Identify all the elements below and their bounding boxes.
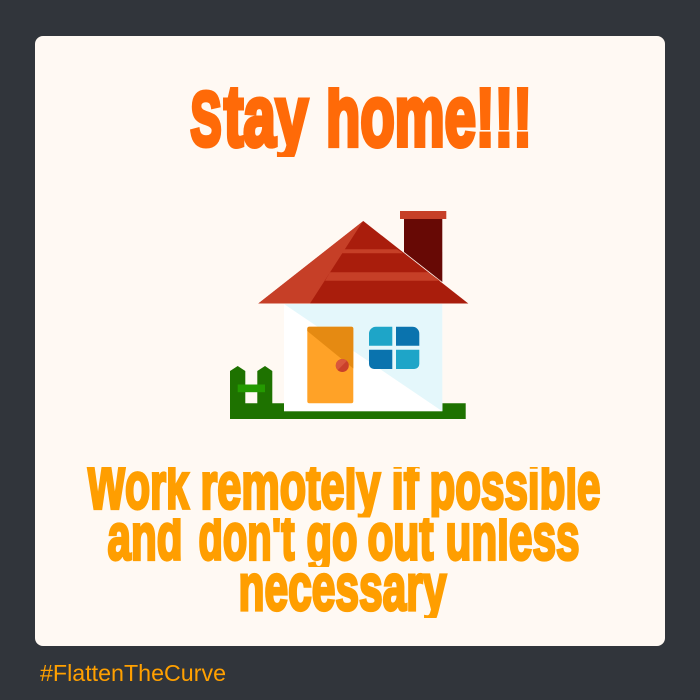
door	[307, 327, 353, 403]
door knob	[336, 359, 349, 372]
body text: unless	[446, 499, 580, 573]
hashtag footer: #FlattenTheCurve	[40, 660, 226, 686]
house wall	[284, 304, 442, 411]
body text: remotely	[200, 448, 381, 522]
body text: possible	[430, 448, 600, 522]
title: home!!!	[326, 68, 532, 164]
icon: house	[230, 211, 468, 419]
ground and fence	[230, 366, 466, 419]
body text	[86, 467, 600, 618]
title: tay	[224, 68, 308, 164]
title: S	[190, 78, 222, 162]
body text: necessary	[238, 550, 447, 624]
chimney	[400, 211, 446, 282]
window	[369, 327, 419, 369]
title	[190, 87, 528, 157]
panel: main card	[35, 36, 665, 646]
body text: don't	[198, 499, 295, 573]
body text: go	[306, 499, 358, 573]
body text: if	[392, 448, 419, 522]
body text: out	[368, 499, 434, 573]
roof	[258, 221, 468, 304]
body text: and	[108, 499, 182, 573]
body text: Work	[87, 448, 189, 522]
